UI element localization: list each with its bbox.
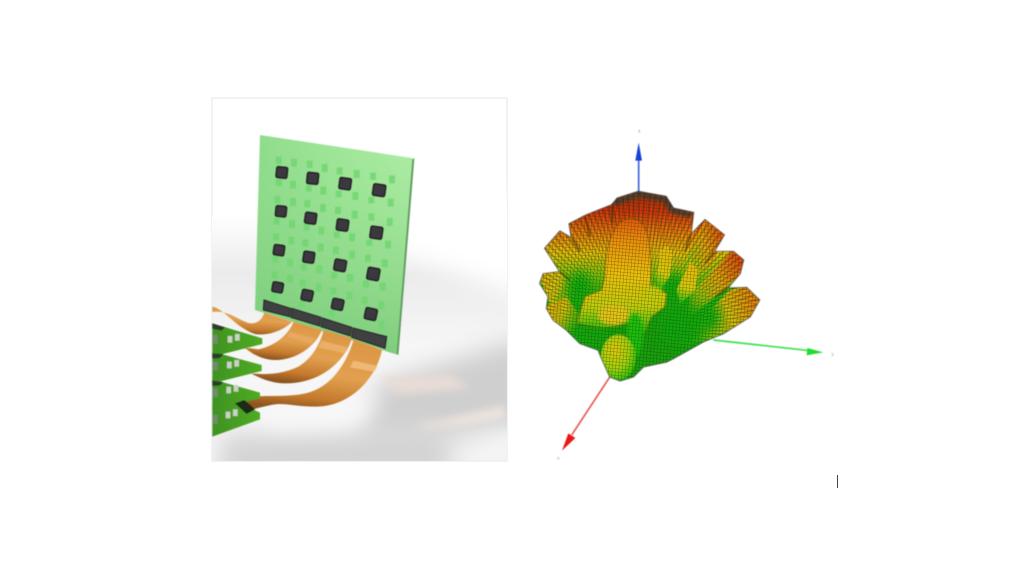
small inner lobes: [656, 246, 673, 290]
centre column: [577, 218, 667, 337]
left lobes: [540, 271, 572, 304]
soft background and floor shadows: [212, 184, 507, 461]
radiation lobes: [538, 190, 761, 382]
dark top fringe: [613, 194, 692, 215]
axis x (red arrow): x: [557, 455, 560, 460]
axis x (red arrow): [557, 377, 610, 460]
axis z (blue arrow): z: [638, 129, 641, 134]
panel: 3D radiation pattern: [530, 129, 834, 460]
antenna circuit board: [255, 135, 414, 355]
cursor bar: [837, 475, 838, 488]
mesh overlay: [540, 192, 759, 380]
connector strips: [263, 300, 387, 348]
colour body: [539, 192, 758, 382]
lobe separators: [560, 206, 727, 297]
faint patch elements: [271, 157, 395, 329]
axis z (blue arrow): [635, 129, 642, 195]
green valleys: [567, 271, 720, 347]
lower blob lobe: [601, 335, 636, 380]
antenna chips: [272, 166, 386, 321]
panel: antenna array illustration: [211, 98, 508, 462]
axis y (green arrow): [713, 340, 834, 357]
silhouette outline: [540, 192, 759, 381]
right lobe tips: [684, 220, 724, 278]
flexible ribbon cables: [212, 307, 382, 411]
radial lobe ridges: [553, 250, 720, 417]
stacked green circuit boards: [212, 323, 262, 437]
axis y (green arrow): y: [831, 352, 834, 357]
